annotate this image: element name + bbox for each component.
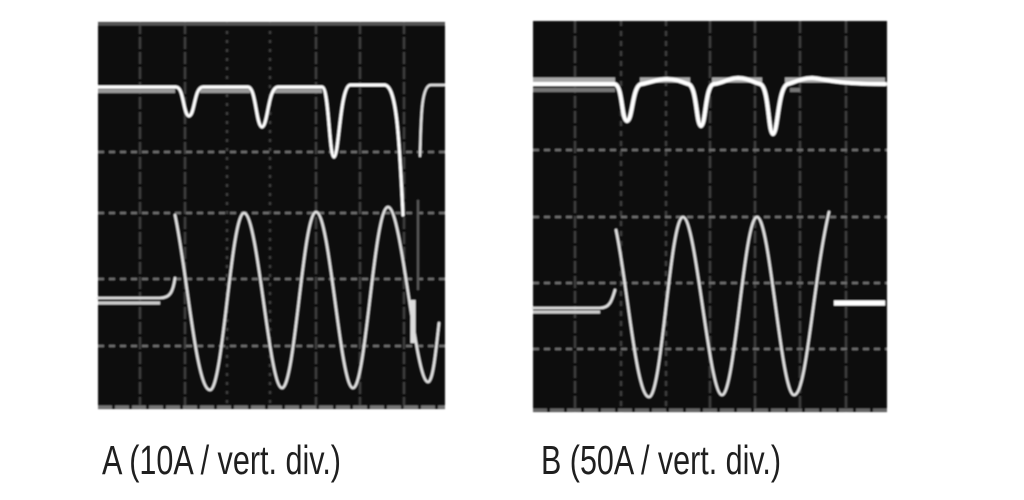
upper trace A [98, 85, 403, 215]
upper trace B [533, 78, 885, 134]
panel: oscilloscope trace A [98, 22, 445, 409]
lower trace A [98, 207, 439, 390]
right flat trace B [834, 300, 885, 306]
label A: A (10A / vert. div.) [102, 437, 341, 483]
lower trace B [533, 212, 829, 397]
label B: B (50A / vert. div.) [541, 437, 781, 483]
panel: oscilloscope trace B [533, 21, 887, 412]
